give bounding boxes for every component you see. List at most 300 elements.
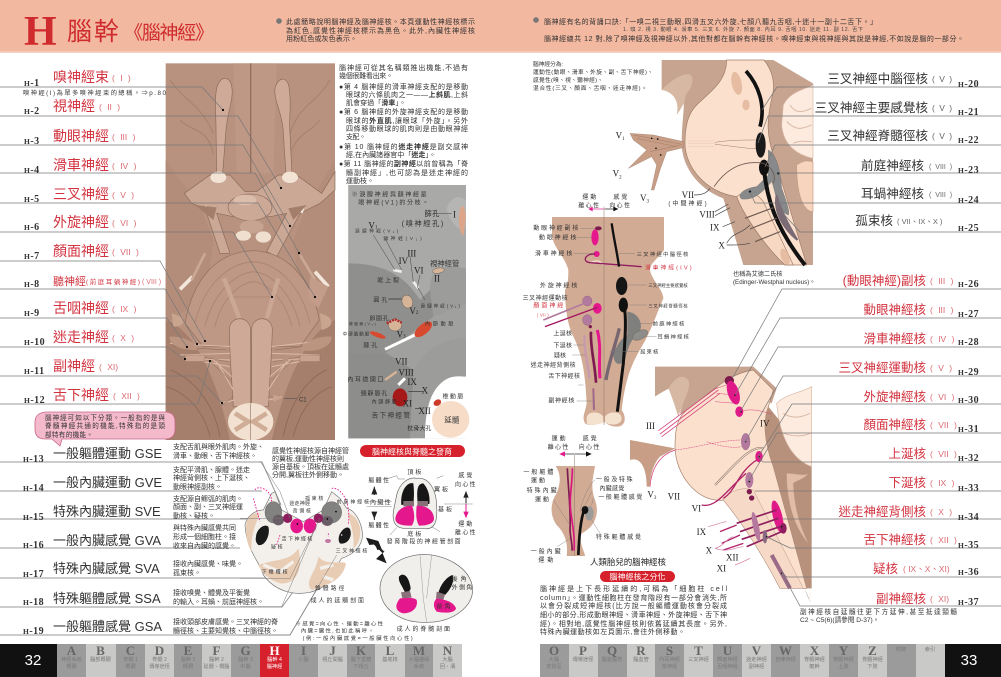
H-37 accessory nucleus: ( XI)	[930, 594, 949, 604]
H-3 oculomotor nerve label: ( III )	[112, 132, 136, 142]
page subtitle: 《腦神經》	[124, 22, 214, 44]
H-14 GVE: 支配平滑肌、腺體。迷走	[173, 465, 250, 474]
tab T	[684, 643, 713, 677]
direction labels: 離心性	[548, 443, 568, 451]
tab O: 皮質區	[546, 662, 562, 670]
illustration: skull base foramina: II	[434, 274, 440, 284]
illustration: sagittal brainstem motor nuclei: III	[646, 421, 655, 431]
pituitary and mammillary bodies	[228, 194, 272, 243]
side text on cranial nerve function: ●第 6 腦神經的外旋神經支配的是移動	[339, 107, 468, 116]
tab appendix	[887, 644, 916, 677]
tab Z: Z	[868, 643, 877, 658]
H-22 spinal nucleus: 三叉神經脊髓徑核	[827, 129, 928, 143]
tab M: M	[413, 643, 425, 658]
tab V: 副神經	[749, 662, 764, 670]
H-10 vagus nerve label: H-10	[24, 337, 45, 348]
tab Q: Q	[607, 643, 617, 658]
tab A	[57, 643, 86, 677]
H-21 main sensory nucleus	[758, 100, 1001, 143]
H-15 SVE: 支配源自鰓弧的肌肉。	[173, 494, 243, 503]
illustration: sagittal brainstem motor nuclei: IV	[760, 419, 770, 429]
illustration: dorsal brainstem nuclei: 三叉神經中腦徑核	[637, 250, 689, 258]
H-23 vestibular nuclei: ( VIII )	[929, 164, 952, 171]
direction labels for dorsal brainstem: 感覺	[613, 193, 627, 201]
tab W: W	[779, 643, 792, 658]
H-20 mesencephalic nucleus: 三叉神經中腦徑核	[827, 72, 928, 86]
header note right: 腦神經總共 12 對,除了嗅神經及視神經以外,其他對都在腦幹有神經核。嗅神經束與視神經與其說是神經,不如說是腦的一部分。	[544, 34, 964, 43]
tab H active	[260, 643, 289, 677]
medulla labels: 錐體路徑	[315, 584, 345, 592]
illustration: sagittal brainstem sensory nuclei: 2	[619, 175, 622, 180]
H-16 GVA: 一般內臟感覺 GVA	[53, 533, 161, 548]
page number 32	[0, 644, 57, 677]
illustration: dorsal brainstem nuclei: 外旋神經核	[540, 281, 577, 289]
tab T: 三叉神經	[688, 655, 709, 663]
spinal cord labels: 前角	[437, 602, 451, 610]
H-22 spinal nucleus	[765, 129, 1001, 167]
illustration: skull base foramina: 頸靜脈孔	[361, 389, 387, 397]
tab F: 延髓、橋腦	[204, 662, 229, 670]
illustration: skull base foramina: X	[422, 385, 429, 395]
illustration: skull base foramina: 內頸動脈	[425, 320, 453, 327]
illustration: dorsal brainstem nuclei: 動眼神經副核	[533, 224, 578, 232]
development diagrams	[240, 461, 476, 642]
bottom navigation left: 32	[25, 652, 41, 669]
tab C: 概觀	[125, 662, 136, 670]
H-9 glossopharyngeal nerve label: ( IX )	[112, 304, 137, 314]
H-30 abducens nucleus: H-30	[958, 395, 979, 406]
tab U: U	[723, 643, 733, 658]
illustration: skull base foramina: 圓孔	[373, 296, 387, 304]
H-26 accessory oculomotor nucleus: (動眼神經)副核	[843, 273, 926, 288]
H-12 hypoglossal nerve label: 舌下神經	[53, 387, 109, 403]
direction labels: 運動	[552, 435, 566, 443]
tab E	[174, 643, 202, 677]
H-7 facial nerve label: H-7	[24, 251, 40, 262]
illustration: skull base foramina: VI	[414, 265, 423, 275]
header note left: 用粉紅色或灰色表示。	[286, 34, 357, 43]
H-35 hypoglossal nucleus: 舌下神經核	[863, 533, 926, 547]
tab U: 舌咽神經	[717, 662, 738, 670]
text: origin of nuclei: 源自基板。頂板在延髓處	[272, 462, 349, 471]
H-9 glossopharyngeal nerve label: H-9	[24, 308, 40, 319]
tab K: 腦下垂體	[351, 655, 371, 663]
medulla labels: 三叉神經核	[336, 547, 367, 554]
vagal nuclei and roots	[769, 499, 786, 534]
H-14 GVE: H-14	[23, 483, 44, 494]
note: accessory nucleus extent: 副神經核自延髓往更下方延伸,甚至抵達頸髓	[800, 607, 957, 616]
spinal cord labels: 後角	[452, 575, 467, 583]
illustration: skull base foramina: 視神經管	[430, 259, 459, 268]
H-25 solitary nucleus: H-25	[958, 223, 979, 234]
text: cell column explanation: 特殊內臟運動核如左頁圖示,會往外側移動。	[540, 627, 685, 636]
H-28 trochlear nucleus: ( IV )	[930, 334, 955, 344]
neural tube labels: 頂板	[407, 468, 421, 476]
H-14 GVE	[0, 465, 262, 494]
illustration: skull base foramina: VII	[395, 357, 407, 367]
illustration: skull base foramina: 淚腺神經(V₁)	[355, 227, 399, 234]
caption: fetal cranial nuclei: 人類胎兒的腦神經核	[590, 557, 666, 567]
side text on cranial nerve function: 眼球的外直肌,讓眼球「外旋」。另外	[346, 116, 468, 125]
Edinger-Westphal note: (Edinger-Westphal nucleus)。	[733, 279, 815, 286]
H-33 inferior salivatory nucleus	[755, 476, 1001, 494]
tab N	[433, 643, 462, 677]
header note right	[533, 17, 964, 43]
illustration: skull base foramina	[343, 185, 469, 438]
tab G: G	[240, 643, 251, 658]
side text on cranial nerve function: 腦神經可從其名稱類推出機能,不過有	[339, 63, 468, 72]
H-27 oculomotor nucleus: ( III )	[930, 305, 954, 315]
header band	[0, 0, 1001, 55]
H-24 cochlear nuclei: 耳蝸神經核	[861, 187, 924, 201]
illustration: skull base foramina: 椎動脈	[443, 392, 463, 400]
H-11 accessory nerve label: H-11	[24, 366, 45, 377]
H-15 SVE: 動核、疑核。	[173, 511, 215, 520]
tab C: 脊髓 1	[123, 655, 138, 663]
adult spinal cord section	[380, 554, 473, 622]
tab Y	[829, 643, 858, 677]
H-17 SVA: 接收內臟感覺、味覺。	[173, 559, 243, 568]
H-32 superior salivatory nucleus: 上涎核	[888, 447, 926, 461]
illustration: skull base foramina: V3	[397, 329, 406, 339]
illustration: fetal brainstem nuclei: 一般及特殊	[596, 476, 633, 484]
H-29 trigeminal motor nucleus: ( V )	[930, 363, 952, 373]
tab X: X	[810, 643, 820, 658]
H-37 accessory nucleus: 副神經核	[876, 591, 926, 606]
H-13 GSE: 支配舌肌與眼外肌肉。外旋、	[173, 442, 264, 451]
H-13 GSE: 一般軀體運動 GSE	[53, 446, 162, 461]
tab S: S	[666, 643, 673, 658]
tab Y: 上肢	[838, 662, 849, 670]
Edinger-Westphal note: 也稱為艾德二氏核	[733, 270, 782, 278]
header note left: 此處簡略說明腦神經及腦神經核。本頁運動性神經核標示	[286, 17, 475, 26]
tab V: V	[752, 643, 762, 658]
neural tube labels: 軀體性	[368, 521, 389, 529]
neural tube section	[367, 476, 473, 535]
illustration: skull base foramina: 內頸靜脈	[372, 399, 397, 406]
tab D: D	[155, 643, 164, 658]
H-30 abducens nucleus: 外旋神經核	[863, 390, 926, 404]
neural tube labels: 離心性	[455, 528, 476, 536]
H-10 vagus nerve label: 迷走神經	[53, 329, 109, 345]
tab R: R	[636, 643, 646, 658]
H-14 GVE: 動眼神經副核。	[173, 482, 222, 491]
H-14 GVE: 神經背側核、上下涎核、	[173, 473, 250, 482]
tab L: 基底核	[382, 655, 398, 663]
tab M: 大腦邊緣	[409, 655, 430, 663]
H-31 facial nucleus	[748, 417, 1001, 482]
illustration: dorsal brainstem nuclei: 上涎核	[553, 330, 572, 338]
tab X: 軀幹	[809, 662, 820, 670]
medulla labels	[262, 495, 369, 605]
medulla labels: 孤束核	[305, 495, 323, 502]
tab J	[318, 643, 347, 677]
H-5 trigeminal nerve label: H-5	[24, 194, 40, 205]
H-20 mesencephalic nucleus: H-20	[958, 79, 979, 90]
H-12 hypoglossal nerve label: H-12	[24, 395, 45, 406]
illustration: skull base foramina: XI	[403, 399, 412, 409]
tab S: 核神經	[662, 662, 677, 670]
H-17 SVA	[0, 527, 317, 580]
tab R	[627, 643, 655, 677]
H-34 dorsal vagal nucleus	[782, 505, 1001, 523]
H-1 olfactory tract label: H-1	[24, 78, 40, 89]
side text on cranial nerve function: 運動枝。	[346, 176, 374, 185]
tab P: P	[579, 643, 587, 658]
H-10 vagus nerve label: ( X )	[112, 333, 134, 343]
tab S	[655, 643, 684, 677]
illustration: dorsal brainstem nuclei: 動眼神經核	[539, 233, 576, 241]
medulla labels: 疑核	[271, 543, 283, 550]
tab S: 內耳神經	[659, 655, 680, 663]
H-24 cochlear nuclei	[750, 187, 1001, 206]
illustration: skull base foramina: 棘孔	[363, 341, 377, 349]
illustration: dorsal brainstem nuclei: 迷走神經背側核	[531, 361, 576, 369]
tab Y: 脊髓神經	[833, 655, 854, 663]
H-18 SSA: 特殊軀體感覺 SSA	[53, 591, 161, 606]
illustration: dorsal brainstem nuclei: 耳蝸神經核	[657, 332, 690, 340]
right page note: nerve types: 混合性(三叉、顏面、舌咽、迷走神經)。	[533, 84, 647, 92]
chapter letter H: H	[24, 9, 57, 55]
illustration: sagittal brainstem motor nuclei: VII	[668, 491, 680, 501]
illustration: skull base foramina: 鼻睫神經(V₁)	[421, 302, 460, 309]
red heading: differentiation of nuclei: 腦神經核之分化	[610, 572, 666, 582]
tab F	[202, 643, 231, 677]
note: accessory nucleus extent	[800, 607, 957, 624]
H-25 solitary nucleus: 孤束核	[855, 214, 893, 228]
header note left	[276, 17, 475, 43]
H-35 hypoglossal nucleus	[767, 533, 1001, 551]
H-3 oculomotor nerve label	[0, 128, 291, 227]
medulla pyramids	[229, 319, 251, 407]
H-11 accessory nerve label	[0, 358, 223, 404]
neural tube labels: 基板	[438, 506, 452, 514]
illustration: fetal brainstem nuclei: 一般軀體感覺	[598, 493, 642, 501]
header note right: 1. 嗅 2. 視 3. 動眼 4. 滑車 5. 三叉 6. 外旋 7. 顏面 8. 內耳 9. 舌咽 10. 迷走 11. 副 12. 舌下	[623, 25, 863, 33]
neural tube labels	[368, 468, 476, 546]
illustration: dorsal brainstem nuclei: 前庭神經核	[653, 320, 685, 328]
tab L: L	[386, 643, 395, 658]
H-2 optic nerve label: ( II )	[99, 102, 120, 112]
tab M	[405, 643, 433, 677]
side text on cranial nerve function: ●第 10 腦神經的迷走神經是副交感神	[339, 142, 468, 151]
tab X	[800, 643, 829, 677]
H-19 GSA: 接收頭部皮膚感覺。三叉神經的脊	[173, 617, 278, 626]
tab H active: 腦神經	[267, 662, 282, 670]
H-27 oculomotor nucleus	[735, 303, 1001, 395]
illustration: skull base foramina: 額神經(V₁)	[383, 235, 422, 242]
tab N: 大腦	[442, 655, 453, 663]
H-26 accessory oculomotor nucleus: H-26	[958, 279, 979, 290]
illustration: dorsal brainstem nuclei: ( VII )	[537, 312, 549, 318]
cranial nerve list H-1 to H-12	[0, 69, 316, 406]
text: origin of nuclei: 分開,翼板往外側移動。	[272, 470, 344, 479]
illustration: fetal brainstem nuclei: 特殊內臟	[527, 487, 557, 495]
illustration: skull base foramina: 中硬腦動脈	[343, 330, 370, 337]
illustration: fetal brainstem nuclei: 運動	[531, 477, 545, 485]
H-13 GSE: H-13	[23, 454, 44, 465]
tab Z: 下肢	[867, 662, 878, 670]
illustration: dorsal brainstem nuclei: 疑核	[554, 351, 566, 359]
illustration: skull base foramina: 舌下神經管	[372, 410, 410, 419]
H-13 GSE	[0, 442, 281, 505]
illustration: skull base foramina: III	[407, 249, 416, 259]
illustration: skull base foramina: V2	[409, 306, 419, 316]
direction labels for dorsal brainstem: 向心性	[609, 201, 630, 209]
H-6 abducens nerve label: H-6	[24, 222, 40, 233]
tab P	[569, 643, 598, 677]
H-11 accessory nerve label: 副神經	[53, 358, 95, 374]
illustration: sagittal brainstem motor nuclei: X	[706, 545, 713, 555]
page title: 腦幹	[67, 18, 119, 46]
illustration: skull base foramina: 篩孔	[424, 209, 440, 218]
illustration: sagittal brainstem sensory nuclei	[613, 60, 813, 266]
H-7 facial nerve label: 顏面神經	[53, 243, 109, 259]
tab U: 顏面神經	[717, 655, 738, 663]
H-19 GSA: 髓徑核、主要知覺核、中腦徑核。	[173, 626, 278, 635]
illustration: sagittal brainstem sensory nuclei: V	[616, 130, 622, 140]
H-2 optic nerve label	[0, 98, 282, 189]
tab I: 小腦	[298, 655, 309, 663]
H-22 spinal nucleus: ( V )	[932, 131, 952, 141]
note on terms: (例:一般內臟感覺=一般臟性向心性)	[303, 634, 413, 642]
H-23 vestibular nuclei: H-23	[958, 165, 979, 176]
side text on cranial nerve function: ●第 11 腦神經的副神經以前曾稱為「脊	[339, 159, 468, 168]
illustration: skull base foramina: 硬腦棘(V₃)	[349, 321, 376, 326]
direction labels for dorsal brainstem: 運動	[582, 193, 596, 201]
right page note: nerve types: 腦神經分為:	[533, 60, 563, 68]
illustration: dorsal brainstem nuclei: 孤束核	[640, 347, 659, 355]
H-33 inferior salivatory nucleus: 下涎核	[888, 476, 926, 490]
illustration: dorsal brainstem nuclei: 舌下神經核	[548, 372, 580, 380]
illustration: sagittal brainstem sensory nuclei: V	[613, 169, 619, 179]
illustration: sagittal brainstem sensory nuclei: (中間神經)	[668, 200, 707, 208]
neural tube labels: 內臟性	[370, 498, 391, 506]
H-28 trochlear nucleus: H-28	[958, 337, 979, 348]
illustration: skull base foramina: 眼神經(V1)的分枝。	[358, 199, 428, 207]
H-32 superior salivatory nucleus	[758, 447, 1001, 464]
tab E: 腦幹 1	[181, 655, 195, 663]
neural tube labels: 感覺	[458, 471, 472, 479]
tab Z	[858, 643, 887, 677]
illustration: sagittal brainstem motor nuclei: IX	[697, 527, 707, 537]
illustration: sagittal brainstem sensory nuclei: IX	[710, 222, 720, 232]
header note right: 腦神經有名的背誦口訣:「一嗅二視三動眼,四滑五叉六外旋,七顏八聽九舌咽,十迷十一副十二舌下。」	[544, 17, 877, 26]
tab L	[375, 643, 405, 677]
H-32 superior salivatory nucleus: H-32	[958, 453, 979, 464]
H-16 GVA: 與特殊內臟感覺共同	[173, 523, 236, 532]
H-36 nucleus ambiguus: 疑核	[873, 561, 898, 576]
tab K	[347, 643, 375, 677]
tab T: T	[694, 643, 703, 658]
tab V: 迷走神經	[746, 655, 767, 663]
H-21 main sensory nucleus: H-21	[958, 107, 979, 118]
sensory nuclei gray	[613, 312, 641, 364]
H-15 SVE: 顏面、副、三叉神經運	[173, 502, 243, 511]
tab A: A	[67, 643, 77, 658]
illustration right labels H-26 to H-37	[733, 273, 1001, 608]
illustration: fetal brainstem nuclei	[523, 435, 642, 564]
illustration: sagittal brainstem motor nuclei: VI	[692, 504, 701, 514]
illustration: dorsal brainstem nuclei: 滑車神經(IV)	[645, 263, 692, 271]
tab A: 概觀	[66, 662, 77, 670]
H-19 GSA: H-19	[23, 626, 44, 637]
illustration: skull base foramina: I	[453, 210, 456, 220]
note: accessory nucleus extent: C2 ~ C5(6)(請參閱 D-37)。	[800, 615, 879, 624]
illustration: ventral brain base with cranial nerves: C1	[299, 397, 307, 403]
side text on cranial nerve function: 肌會穿過「滑車」。	[346, 98, 406, 107]
H-5 trigeminal nerve label: 三叉神經	[53, 186, 109, 202]
illustration: sagittal brainstem sensory nuclei: X	[718, 240, 725, 250]
tab R: 腦血管	[633, 655, 649, 663]
H-17 SVA: H-17	[23, 569, 44, 580]
H-35 hypoglossal nucleus: ( XII )	[930, 535, 957, 545]
tab H active: 腦幹 4	[267, 655, 282, 663]
medulla labels: 背側核	[293, 507, 311, 514]
spinal cord labels	[397, 575, 472, 633]
illustration: skull base foramina: XII	[418, 406, 431, 416]
tab Z: 脊髓神經	[862, 655, 883, 663]
red heading: differentiation of nuclei	[600, 571, 675, 582]
motor nuclei	[595, 226, 602, 230]
H-27 oculomotor nucleus: 動眼神經核	[863, 303, 926, 317]
tab E: E	[184, 643, 192, 658]
direction arrows	[366, 487, 469, 563]
text: cell column explanation: column」。運動性細胞柱在發育階段有一部分會消失,所	[540, 593, 727, 602]
nerve rootlets	[170, 340, 330, 403]
pink callout on nerve classification: 腦神經可如以下分類。一般指的是與	[45, 413, 165, 422]
tab W	[771, 643, 800, 677]
tab C	[116, 643, 145, 677]
illustration: skull base foramina: 延髓	[444, 415, 460, 424]
tab W: 自律神經	[775, 655, 796, 663]
illustration: fetal brainstem nuclei: 一般內臟	[531, 547, 561, 555]
direction labels	[548, 435, 599, 457]
side text on cranial nerve function: 支配。	[346, 132, 366, 141]
H-19 GSA: 一般軀體感覺 GSA	[53, 619, 162, 634]
H-8 vestibulocochlear nerve label: (前庭耳蝸神經)	[86, 277, 140, 286]
neural tube labels: 發育階段的神經管剖面	[387, 538, 461, 546]
H-17 SVA: 孤束核。	[173, 568, 201, 577]
neural tube labels: 運動	[458, 520, 472, 528]
illustration: skull base foramina: IX	[407, 377, 417, 387]
right page note: nerve types	[533, 60, 653, 92]
tab J: 視丘間腦	[322, 655, 343, 663]
H-5 trigeminal nerve label: ( V )	[112, 190, 134, 200]
illustration: sagittal brainstem motor nuclei: V	[647, 489, 654, 499]
H-21 main sensory nucleus: 三叉神經主要感覺核	[815, 100, 928, 115]
H-4 trochlear nerve label	[0, 157, 300, 254]
tab index: 索引	[925, 645, 935, 653]
H-7 facial nerve label	[0, 243, 206, 342]
pink callout on nerve classification: 脊髓神經共通的機能,特殊指的是頭	[45, 421, 165, 430]
H-25 solitary nucleus	[780, 210, 1001, 234]
black trigeminal nuclei	[746, 71, 762, 127]
text: origin of nuclei: 感覺性神經核源自神經管	[272, 446, 349, 455]
direction labels: 感覺	[583, 435, 597, 443]
red heading: nuclei and spinal development: 腦神經核與脊髓之發育	[372, 446, 452, 456]
pons	[185, 251, 319, 347]
medulla labels: 前庭神經核	[337, 498, 369, 505]
medulla labels: 迷走神經	[289, 500, 310, 507]
tab X: 脊髓神經	[804, 655, 825, 663]
direction labels for dorsal brainstem: 離心性	[578, 201, 599, 209]
black trigeminal column	[612, 223, 619, 267]
H-16 GVA: 收來自內臟的感覺。	[173, 541, 236, 550]
illustration: skull base foramina: VIII	[398, 367, 414, 377]
illustration: skull base foramina: 卵圓孔	[369, 315, 389, 323]
tab Y: Y	[839, 643, 849, 658]
